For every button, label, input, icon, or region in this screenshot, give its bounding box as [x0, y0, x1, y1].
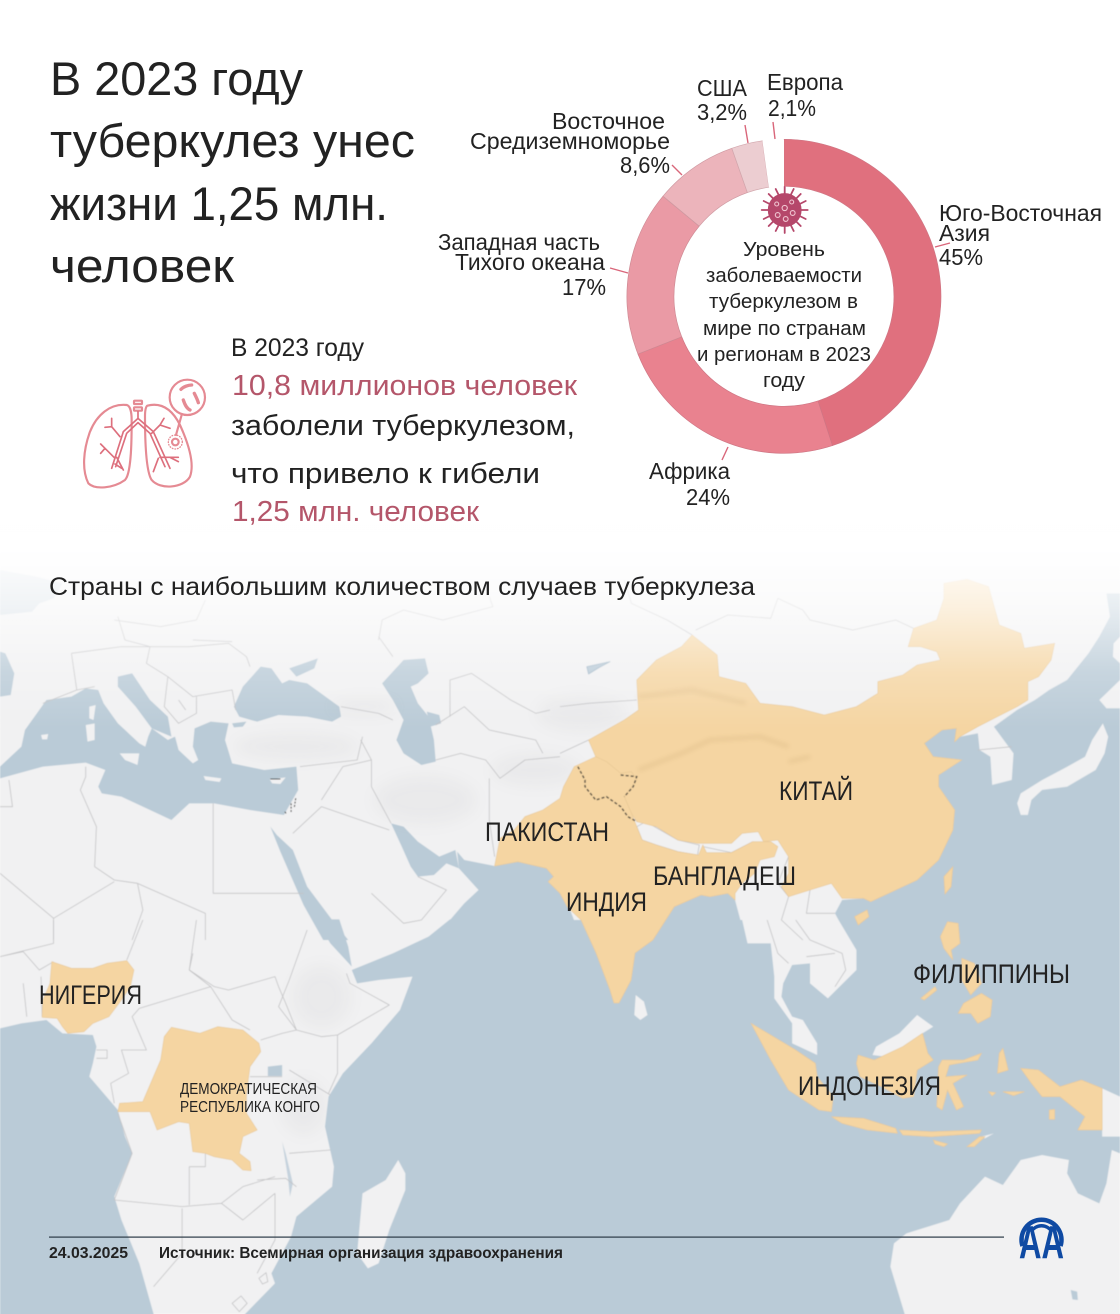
country labels: РЕСПУБЛИКА КОНГО	[180, 1099, 320, 1116]
title	[50, 52, 415, 292]
title: В 2023 году	[50, 52, 303, 105]
footer: Источник: Всемирная организация здравоохранения	[159, 1245, 563, 1262]
segment: South-East Asia 45%	[784, 139, 941, 446]
label: Eastern Mediterranean	[470, 108, 670, 178]
map heading: Страны с наибольшим количеством случаев туберкулеза	[49, 573, 755, 601]
donut center text: мире по странам	[703, 318, 866, 340]
label: Western Pacific: 17%	[562, 274, 606, 300]
country: Nigeria	[42, 961, 134, 1033]
country labels: ДЕМОКРАТИЧЕСКАЯ	[180, 1081, 317, 1098]
text block: key figures: заболели туберкулезом,	[231, 410, 575, 442]
country labels: КИТАЙ	[779, 775, 853, 806]
title: туберкулез унес	[50, 114, 415, 167]
seas: Europe and Middle East	[0, 570, 560, 940]
text block: key figures: 1,25 млн. человек	[232, 496, 479, 528]
label: Europe	[767, 69, 843, 121]
title: человек	[50, 239, 234, 292]
terrain shading	[236, 697, 624, 1133]
logo: Anadolu Agency	[1019, 1216, 1064, 1268]
label: South-East Asia: 45%	[939, 244, 983, 270]
segment: Africa 24%	[638, 337, 832, 453]
seas: East Asia	[560, 593, 1120, 940]
title: жизни 1,25 млн.	[50, 177, 388, 230]
text block: key figures: В 2023 году	[231, 334, 364, 362]
country borders	[0, 580, 1012, 1312]
text block: key figures	[231, 334, 577, 528]
icon: virus	[762, 187, 808, 233]
leader lines	[610, 122, 950, 460]
country: Democratic Republic of the Congo	[118, 1027, 261, 1171]
footer	[49, 1236, 1004, 1262]
country: Philippines and Indonesia	[751, 922, 1102, 1147]
label: South-East Asia: Юго-Восточная	[939, 200, 1102, 226]
segment: Eastern Mediterranean 8.6%	[663, 148, 747, 226]
country labels: ИНДИЯ	[566, 887, 647, 917]
label: Europe: 2,1%	[768, 95, 816, 121]
segment: USA 3.2%	[732, 141, 769, 193]
label: South-East Asia	[939, 200, 1102, 270]
donut center text: году	[763, 370, 805, 392]
label: Western Pacific: Западная часть	[438, 229, 600, 255]
icon: lungs with bacteria	[84, 380, 205, 487]
donut center text: Уровень	[743, 239, 825, 261]
label: USA	[697, 75, 748, 125]
label: USA: США	[697, 75, 748, 101]
donut center text: заболеваемости	[706, 265, 862, 287]
country labels: ПАКИСТАН	[485, 817, 609, 847]
country labels: БАНГЛАДЕШ	[653, 861, 796, 891]
label: Europe: Европа	[767, 69, 843, 95]
segment: Europe 2.1%	[762, 139, 784, 187]
country labels	[39, 775, 1070, 1116]
logo: Anadolu Agency: AA	[1019, 1216, 1064, 1268]
donut center text	[697, 239, 871, 392]
label: Africa: 24%	[686, 484, 730, 510]
highlighted countries	[42, 579, 1102, 1171]
label: Africa	[649, 458, 730, 510]
text block: key figures: что привело к гибели	[231, 458, 540, 490]
label: South-East Asia: Азия	[939, 220, 990, 246]
label: Western Pacific	[438, 229, 606, 300]
segment: Western Pacific 17%	[627, 196, 699, 354]
country labels: ИНДОНЕЗИЯ	[798, 1071, 941, 1101]
country labels: НИГЕРИЯ	[39, 980, 142, 1010]
country labels: ФИЛИППИНЫ	[913, 959, 1070, 989]
label: USA: 3,2%	[697, 99, 747, 125]
label: Africa: Африка	[649, 458, 730, 484]
country: India, Pakistan, Bangladesh	[495, 757, 778, 1003]
text block: key figures: 10,8 миллионов человек	[232, 370, 577, 402]
label: Eastern Mediterranean: Восточное	[552, 108, 665, 134]
seas: Indian Ocean and Southeast Asia	[560, 920, 1120, 1314]
footer: 24.03.2025	[49, 1245, 128, 1262]
country: China	[589, 579, 1055, 925]
label: Eastern Mediterranean: 8,6%	[620, 152, 670, 178]
donut center text: туберкулезом в	[709, 291, 858, 313]
label: Western Pacific: Тихого океана	[455, 249, 605, 275]
seas: Africa	[0, 919, 560, 1314]
donut center text: и регионам в 2023	[697, 344, 871, 366]
top fade of map	[0, 525, 1120, 730]
donut chart	[627, 139, 941, 453]
map	[0, 530, 1120, 1314]
label: Eastern Mediterranean: Средиземноморье	[470, 128, 670, 154]
